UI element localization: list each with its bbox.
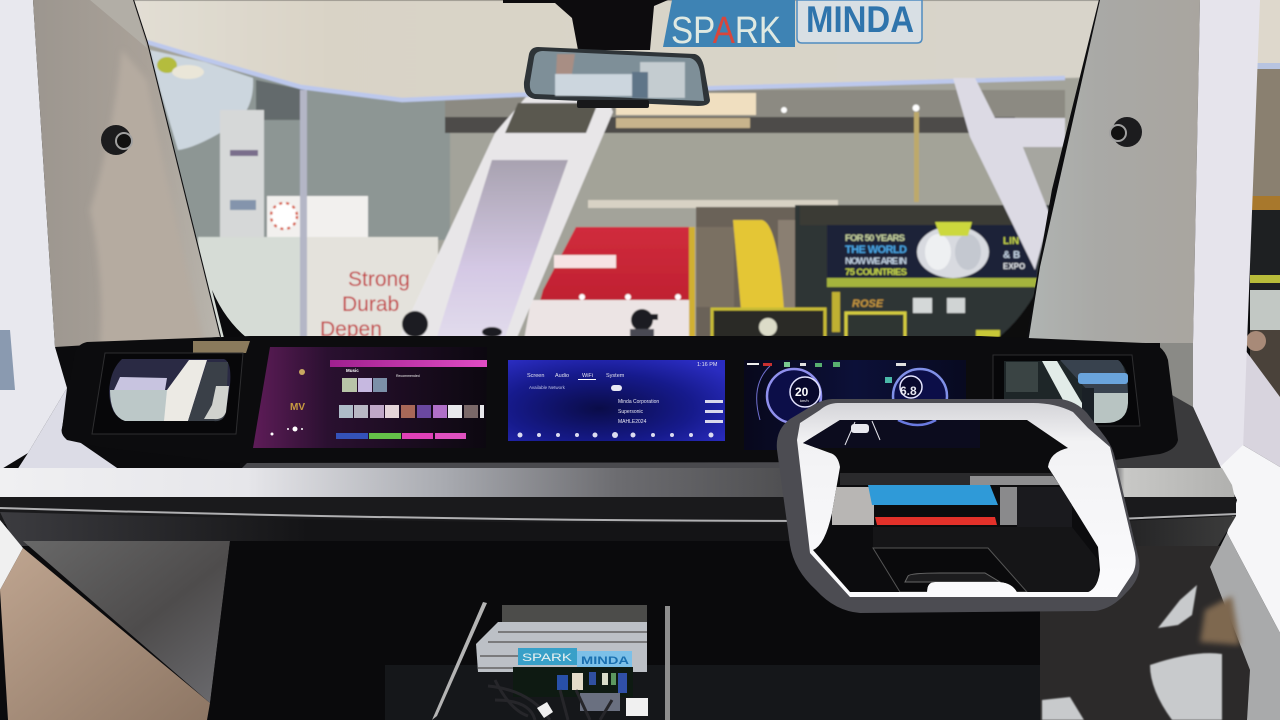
yellow framed kiosk <box>712 309 825 339</box>
right dark floor <box>1030 546 1250 720</box>
logo label <box>518 648 632 668</box>
blue control <box>868 485 998 505</box>
car graphic <box>845 421 880 445</box>
red booth lights <box>579 294 681 300</box>
speed gauge: 20 <box>795 385 809 399</box>
white lower booth <box>524 300 689 340</box>
white strut <box>164 360 207 421</box>
upper dark band <box>800 206 1011 225</box>
yoke white face <box>797 403 1136 597</box>
glass post <box>300 90 307 340</box>
dashboard upper strip <box>240 460 800 470</box>
structure gap <box>505 103 598 133</box>
right angled strut <box>953 78 1065 270</box>
centre floor <box>208 541 1040 720</box>
brown lower band <box>696 207 796 340</box>
man head <box>1246 331 1266 351</box>
instrument cluster screen <box>744 360 966 450</box>
dashboard dark groove <box>0 497 1236 524</box>
yoke outer rim <box>777 399 1139 613</box>
category tiles <box>336 433 466 439</box>
toggle <box>611 385 622 391</box>
panel corner sliver <box>90 0 147 48</box>
lavender block <box>114 377 167 390</box>
dark truss band <box>445 117 1015 133</box>
person shirt <box>630 329 654 340</box>
silver trim left <box>832 487 874 525</box>
booth slogan: Durab <box>342 293 399 316</box>
left white floor wedge <box>0 520 23 590</box>
hall wall <box>590 133 990 201</box>
right side mirror screen <box>993 355 1140 426</box>
left side mirror screen <box>92 353 243 434</box>
red control <box>875 517 997 525</box>
ceiling banner <box>130 0 1110 100</box>
white minda panel <box>797 0 922 43</box>
rear-view mirror stalk <box>503 0 668 50</box>
grey band <box>840 473 1070 485</box>
dark booth <box>1250 210 1280 290</box>
booth slogan <box>320 270 410 336</box>
network names: Minda Corporation <box>618 399 659 405</box>
tab labels <box>527 362 718 379</box>
mirror base <box>577 100 649 108</box>
connectors <box>557 672 627 693</box>
clock logo panel <box>267 196 368 237</box>
gauge lower arc <box>898 420 936 425</box>
cluster seen through yoke <box>790 418 980 448</box>
windshield frame lines <box>133 0 1100 340</box>
top scene <box>1060 360 1128 393</box>
dashboard lower band <box>0 512 1236 546</box>
status icons <box>747 362 906 383</box>
artwork row two <box>339 405 484 418</box>
right floor tan patch <box>1200 596 1240 645</box>
dark banner <box>827 225 1037 278</box>
network heading: Available Network <box>529 385 566 390</box>
network names: Supersonic <box>618 409 644 415</box>
lower booth details <box>832 292 1000 340</box>
blue strip <box>1250 63 1280 69</box>
bottom icons <box>518 432 714 438</box>
banner right text: LIN <box>1003 236 1019 247</box>
silver trim right <box>1000 487 1017 525</box>
album glyph: MV <box>290 402 305 413</box>
brand sign <box>663 0 922 52</box>
booth label <box>554 255 616 268</box>
network icons <box>705 400 723 423</box>
rear-view mirror <box>524 47 710 108</box>
banner right text: & B <box>1003 250 1020 261</box>
dark wall segment <box>256 80 305 120</box>
banner disc graphic <box>917 222 989 278</box>
yellow pole <box>914 112 919 202</box>
white angled structure <box>398 95 613 340</box>
acrylic left edge <box>432 602 487 720</box>
yellow post <box>689 227 695 337</box>
heatsink fins <box>476 622 647 672</box>
network names: MAHLE2024 <box>618 419 647 425</box>
banner text: THE WORLD <box>845 244 907 256</box>
banner text: FOR 50 YEARS <box>845 233 905 244</box>
wiring <box>488 680 612 720</box>
dashboard chrome seam <box>0 508 1236 521</box>
right white floor edge <box>1220 445 1280 633</box>
silver strip right <box>970 476 1060 485</box>
section caption: Recommended <box>396 374 420 378</box>
panel reflection <box>90 50 205 347</box>
dashboard light band <box>0 468 1236 503</box>
right window <box>1023 147 1065 205</box>
right console <box>1017 487 1072 527</box>
speed gauge <box>757 366 821 423</box>
left grey floor <box>23 541 230 703</box>
purple window in structure <box>436 160 568 340</box>
banner right text: EXPO <box>1003 262 1025 271</box>
pale reflection <box>172 65 204 79</box>
music header bar <box>330 360 487 367</box>
green reflection <box>157 57 177 73</box>
left interior panel <box>33 0 220 347</box>
white strut <box>1042 361 1088 413</box>
mirror frame <box>524 47 710 106</box>
lower console <box>873 527 1098 592</box>
yellow staircase <box>733 220 784 310</box>
tab labels: Audio <box>555 373 569 379</box>
stalk <box>905 573 1000 582</box>
active tab underline <box>578 379 596 380</box>
pale floor band <box>588 200 838 208</box>
person <box>1082 388 1094 424</box>
green rail <box>827 278 1039 287</box>
housing top reflection <box>193 341 250 353</box>
yoke opening contents <box>790 415 1110 600</box>
heatsink top <box>502 605 647 623</box>
logo label: SPARK <box>522 652 573 664</box>
windshield scene <box>130 0 1110 345</box>
circuit board <box>513 667 633 697</box>
right white pillar <box>1193 0 1260 467</box>
banner right text <box>1003 236 1025 271</box>
upper hall ceiling <box>445 90 1065 118</box>
frosted glass bubble <box>150 50 253 150</box>
banner text: NOW WE ARE IN <box>845 256 907 267</box>
right camera knob <box>1110 117 1142 147</box>
artwork row one <box>342 378 387 392</box>
column shroud <box>873 548 1027 592</box>
tan wall <box>1250 69 1280 196</box>
orange band <box>1250 196 1280 210</box>
dark interior <box>188 362 228 421</box>
logo label: MINDA <box>581 655 629 667</box>
hall base <box>147 40 1080 336</box>
white plugs <box>537 698 648 718</box>
infotainment music screen <box>253 347 487 448</box>
red booth <box>540 226 690 300</box>
left white pillar <box>0 0 67 470</box>
left dash wedge <box>17 388 120 470</box>
dashboard right surface <box>1040 395 1222 470</box>
pale ground <box>110 390 170 421</box>
white booth wall <box>306 236 439 336</box>
yoke steering wheel <box>777 399 1139 613</box>
lower booth details: ROSE <box>852 298 884 310</box>
dark figure <box>1250 330 1280 400</box>
blue sign <box>1078 373 1128 384</box>
left outer scene <box>0 330 30 440</box>
booth slogan: Depen <box>320 318 382 341</box>
blue light strip <box>147 42 1065 100</box>
white chair <box>204 386 229 419</box>
booth slogan: Strong <box>348 268 410 291</box>
cream strip <box>1250 0 1280 63</box>
tab labels: System <box>606 373 625 379</box>
opening base <box>790 415 1110 600</box>
staircases <box>696 220 796 308</box>
fin lines <box>478 632 647 668</box>
settings wifi screen <box>508 360 725 441</box>
seat shape <box>1006 362 1038 392</box>
right interior panel <box>1028 0 1200 343</box>
power gauge <box>893 369 947 423</box>
booth sign column <box>220 110 264 238</box>
mirror image base <box>109 359 230 421</box>
left wall tint <box>198 237 300 340</box>
power gauge: 6.8 <box>900 384 917 398</box>
logo word spark: SPARK <box>671 10 781 52</box>
dashboard shadow strip <box>240 455 1040 472</box>
display housing <box>62 336 1178 463</box>
music title: Music <box>346 368 359 373</box>
yellow strip <box>1250 275 1280 283</box>
right lavender wall <box>1243 347 1280 467</box>
dark exhibitor booth <box>795 205 1055 340</box>
banner text: 75 COUNTRIES <box>845 267 907 278</box>
mirror reflection <box>555 54 685 98</box>
mirror dark base <box>1004 361 1128 423</box>
speed gauge: km/h <box>800 398 809 403</box>
dash support right <box>1160 343 1193 407</box>
tab labels: WiFi <box>582 373 593 379</box>
pale ground <box>1093 393 1128 423</box>
right outer scene <box>1246 0 1280 400</box>
people <box>402 309 658 337</box>
right floor reflections <box>1042 585 1222 720</box>
mirror bezel line <box>92 353 243 434</box>
blue spark panel <box>663 0 795 47</box>
playback controls <box>270 426 303 436</box>
bright area <box>1250 290 1280 330</box>
tab labels: Screen <box>527 373 544 379</box>
right grey floor strip <box>1210 533 1280 720</box>
banner text <box>845 233 907 278</box>
moon glyph <box>299 369 305 375</box>
tab labels: 1:16 PM <box>697 362 718 368</box>
network names <box>618 399 659 425</box>
left glass wall <box>160 72 450 240</box>
grey plate <box>580 693 620 711</box>
lower right black frame <box>995 285 1040 340</box>
mirror bezel <box>993 355 1140 426</box>
logo word minda: MINDA <box>806 0 914 40</box>
left camera knob <box>101 125 132 155</box>
electronics enclosure <box>432 602 670 720</box>
mirror glass <box>530 51 704 101</box>
lower left black frame <box>212 290 247 338</box>
left tan floor <box>0 548 210 720</box>
acrylic right edge <box>665 606 670 720</box>
overhead lights <box>616 93 920 128</box>
carpet <box>385 665 1040 720</box>
